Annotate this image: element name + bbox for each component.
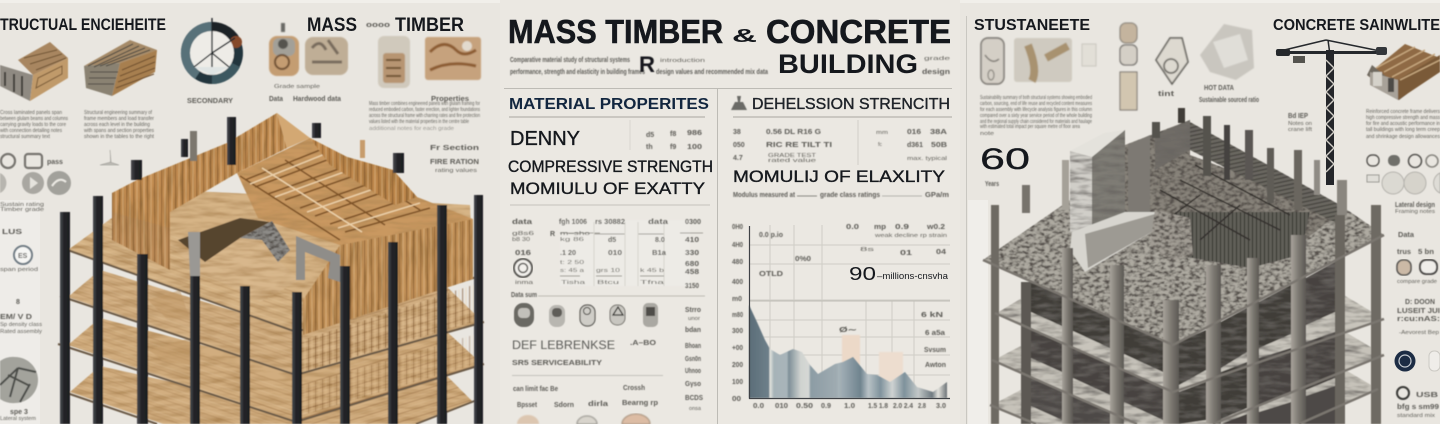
right label column: unor bbox=[688, 316, 700, 322]
icons: small round grey badges: Rated assembly bbox=[0, 329, 43, 335]
icons: bottom peach seals bbox=[517, 414, 650, 424]
heading: timber: TIMBER bbox=[395, 15, 464, 36]
right label column: bdan bbox=[685, 327, 701, 334]
chart annotations: 04 bbox=[936, 249, 946, 256]
text block: timber copy: across the structural frame with charring rates and fire protection bbox=[369, 113, 480, 119]
icons: small round grey badges: Sp density class bbox=[0, 322, 43, 328]
rule: data section: Data sum bbox=[511, 292, 537, 299]
text block: sustainability copy: and the regional supply chain considered for materials and haulage bbox=[980, 119, 1092, 125]
text block: structural copy one bbox=[0, 110, 68, 140]
illustration: concrete tower bbox=[983, 108, 1384, 424]
y axis labels: 480 bbox=[732, 259, 743, 266]
y axis labels: 100 bbox=[732, 379, 743, 386]
title: concrete: CONCRETE bbox=[766, 13, 951, 50]
panel: mass timber top diagrams bbox=[100, 15, 481, 174]
x axis labels: 3.0 bbox=[936, 403, 946, 410]
chart annotations: 0%0 bbox=[795, 256, 811, 263]
chart grid bbox=[749, 225, 950, 398]
chart annotations: 0.9 bbox=[895, 224, 909, 231]
chart annotations: Ø∼ bbox=[839, 327, 857, 334]
text block: sustainability copy bbox=[980, 95, 1092, 137]
label: small connector word: oooo bbox=[366, 22, 390, 29]
compression values: 38A bbox=[930, 129, 947, 136]
floor plate grain bbox=[68, 212, 483, 424]
text block: deflection details: Bearng rp bbox=[622, 400, 658, 407]
chart annotations: mp bbox=[874, 224, 886, 231]
storey edge beams bbox=[983, 235, 1384, 424]
text block: timber copy: additional notes for each grade bbox=[369, 126, 454, 132]
right label column bbox=[685, 307, 703, 412]
row: density: DENNY bbox=[510, 128, 580, 150]
text block: concrete density labels: -Aevorest Bep bbox=[1399, 330, 1439, 336]
x axis labels: 1.5 1.8 bbox=[868, 403, 888, 410]
subtitle text lines: performance, strength and elasticity in building frames bbox=[510, 69, 645, 76]
captions: sustainability samples: tint bbox=[1158, 91, 1175, 98]
chart: deflection and strength area bbox=[732, 224, 950, 410]
table: deflection data grid: rs 30882 bbox=[595, 219, 625, 226]
icon: timber block one bbox=[0, 42, 68, 101]
text block: structural copy two: shown in the tables to the right bbox=[84, 134, 155, 140]
subtitle text lines: R bbox=[639, 52, 655, 77]
storey edge beams bbox=[58, 248, 484, 424]
upper posts bbox=[131, 117, 404, 180]
text block: sustainability copy: note bbox=[980, 131, 994, 137]
icon: timber block two bbox=[84, 40, 157, 96]
table: deflection data grid: 0300 bbox=[685, 219, 701, 226]
text block: timber side labels: Fr Section bbox=[430, 145, 479, 152]
text block: concrete lower labels: 5 bn bbox=[1418, 249, 1434, 256]
icon: navy seal bbox=[1394, 350, 1440, 372]
x axis labels: 1.0 bbox=[844, 403, 855, 410]
upper timber volume bbox=[112, 113, 473, 335]
caption: sixty: Years bbox=[985, 181, 999, 188]
text block: deflection details: dirla bbox=[588, 401, 608, 408]
panel rules bbox=[504, 16, 966, 424]
x axis labels: 0.9 bbox=[821, 403, 831, 410]
chart annotations: OTLD bbox=[759, 271, 783, 278]
chart annotations: w0.2 bbox=[926, 224, 945, 231]
table: compression strength bbox=[731, 96, 950, 199]
table: deflection data grid: inma bbox=[515, 280, 533, 286]
icons: five badge row bbox=[514, 303, 658, 327]
text block: timber sample captions: Grade sample bbox=[274, 84, 320, 90]
text block: timber side labels: rating values bbox=[435, 168, 478, 174]
subtitle text lines bbox=[510, 52, 950, 77]
row: modulus of elasticity: MOMIULU OF EXATTY bbox=[510, 180, 705, 198]
compression values: rated value bbox=[768, 158, 816, 164]
y axis labels: 0H0 bbox=[732, 224, 743, 231]
icon: ring seal bbox=[514, 259, 532, 277]
text block: timber copy: reduced embodied carbon, faster erection, and lighter foundations bbox=[369, 107, 480, 113]
callout: 90 value: 90 bbox=[849, 264, 876, 284]
table: deflection data grid: fgh 1006 bbox=[559, 219, 587, 226]
text block: structural copy two: with spans and section properties bbox=[84, 128, 154, 134]
chart axes bbox=[750, 226, 950, 398]
subtitle text lines: design bbox=[922, 69, 950, 76]
text block: concrete lower labels: Framing notes bbox=[1395, 209, 1436, 215]
table: deflection data grid: 8.0 bbox=[655, 237, 665, 244]
text block: structural copy one: structural summary text bbox=[0, 134, 51, 140]
heading icon bbox=[731, 96, 747, 110]
icons: small round grey badges: pass bbox=[47, 159, 63, 166]
text block: deflection details: .A–BO bbox=[630, 340, 657, 347]
table: deflection data grid: k 45 b bbox=[640, 268, 664, 274]
table: deflection data grid: 458 bbox=[685, 269, 699, 276]
text block: concrete copy bbox=[1366, 109, 1440, 140]
text block: deflection details: can limit fac Be bbox=[513, 386, 558, 393]
text block: concrete copy: tall buildings with long term creep bbox=[1366, 127, 1440, 133]
subtitle text lines: design values and recommended mix data bbox=[656, 69, 768, 76]
compression values: 0.56 DL R16 G bbox=[766, 129, 822, 136]
stat: sixty: 60 bbox=[980, 143, 1030, 176]
title: mass timber: MASS TIMBER bbox=[508, 13, 723, 50]
table: deflection data grid: Tfna bbox=[640, 280, 664, 286]
table: deflection data grid: t: 2 50 bbox=[560, 260, 584, 266]
text block: structural copy one: with connection detailing notes bbox=[0, 128, 62, 134]
compression values bbox=[733, 129, 947, 164]
right label column: Bhoan bbox=[685, 343, 701, 350]
table: deflection data grid bbox=[512, 219, 703, 290]
x axis labels: 2.0 2.4 bbox=[893, 403, 913, 410]
icon: grey cross section disc bbox=[0, 357, 38, 403]
panel: concrete right column bbox=[1273, 17, 1440, 419]
caption: disc label: spe 3 bbox=[10, 409, 28, 416]
icon: small ring and code: bfg s sm99 bbox=[1397, 404, 1439, 411]
heading: mass: MASS bbox=[307, 15, 357, 36]
icons: small round grey badges: Sustain rating bbox=[0, 202, 44, 208]
vertical columns bbox=[60, 195, 483, 424]
table: material properties bbox=[508, 96, 713, 198]
concrete tall block bbox=[1070, 130, 1193, 272]
thin divider notes: Modulus measured at bbox=[733, 192, 796, 199]
caption: wheel label: SECONDARY bbox=[187, 98, 233, 105]
subtitle text lines: grade bbox=[924, 56, 950, 62]
y axis labels: 200 bbox=[732, 362, 743, 369]
text block: structural copy two: frame members and load transfer bbox=[84, 116, 154, 122]
text block: deflection details: SR5 SERVICEABILITY bbox=[512, 360, 602, 367]
heading: structural engineering: TRUCTUAL ENCIEHEITE bbox=[0, 16, 166, 34]
text block: structural copy two: Structural engineering summary of bbox=[84, 110, 153, 116]
y axis labels: m80 bbox=[732, 312, 743, 319]
y axis labels: 4H0 bbox=[732, 242, 743, 249]
panel: structural engineering left column bbox=[0, 16, 166, 422]
x axis labels bbox=[753, 403, 946, 410]
text block: sustainability copy: compared over a sixty year service period of the whole building bbox=[980, 113, 1092, 119]
label: small left note bbox=[100, 150, 119, 165]
text block: sustainability copy: for each assembly with lifecycle analysis figures in this column bbox=[980, 107, 1092, 113]
density values: f8 bbox=[670, 131, 676, 138]
icons: small round grey badges: EM/ V D bbox=[0, 314, 32, 321]
text block: concrete lower labels bbox=[1395, 202, 1436, 256]
compression values: 050 bbox=[733, 142, 745, 149]
table: deflection data grid: data bbox=[648, 219, 668, 226]
table: deflection data grid: grs 10 bbox=[596, 268, 620, 274]
text block: timber copy: Mass timber combines engineered panels with glulam framing for bbox=[369, 101, 480, 107]
captions: sustainability samples: Notes on bbox=[1288, 121, 1312, 127]
x axis labels: 0.0 bbox=[753, 403, 764, 410]
subtitle text lines: Comparative material study of structural systems bbox=[510, 57, 630, 64]
text block: timber side labels: FIRE RATION bbox=[430, 159, 479, 166]
text block: deflection details bbox=[512, 340, 663, 409]
icons: small round grey badges: span period bbox=[0, 267, 38, 273]
compression values: fc bbox=[878, 142, 882, 148]
heading: material properties: MATERIAL PROPERITES bbox=[509, 96, 709, 113]
text block: timber side labels bbox=[430, 145, 479, 174]
vertical concrete columns bbox=[991, 205, 1381, 424]
table: deflection data grid: m–sho bbox=[560, 231, 590, 237]
y axis labels: 400 bbox=[732, 279, 743, 286]
icon: tower crane bbox=[1276, 40, 1387, 185]
table: deflection data grid: kg 86 bbox=[560, 237, 584, 243]
icons: concrete badges bbox=[1367, 154, 1440, 194]
table: deflection data grid: 330 bbox=[685, 250, 699, 257]
text block: sustainability copy: with estimated total impact per square metre of floor area bbox=[980, 124, 1080, 130]
table: deflection data grid: Btcu bbox=[597, 280, 619, 286]
table: deflection data grid: 410 bbox=[685, 237, 699, 244]
table: deflection data grid: b8 30 bbox=[512, 237, 530, 243]
peach highlight bars bbox=[842, 335, 903, 382]
text block: concrete lower labels: Data bbox=[1398, 232, 1414, 239]
y axis labels: 00 bbox=[732, 396, 741, 403]
y axis labels: m0 bbox=[732, 296, 742, 303]
icon: small ring and code: USB bbox=[1416, 392, 1438, 399]
heading: compression strength: DEHELSSION STRENCITH bbox=[752, 96, 950, 113]
text block: timber sample captions: Data bbox=[269, 96, 283, 103]
table: deflection data grid: 3150 bbox=[685, 283, 699, 290]
title block bbox=[508, 13, 951, 79]
panel: centre title and tables bbox=[504, 13, 966, 424]
right label column: onsa bbox=[689, 406, 701, 412]
text block: deflection details: Sdorn bbox=[554, 402, 574, 409]
captions: sustainability samples: Sustainable sourced ratio bbox=[1199, 97, 1259, 104]
chart annotations bbox=[759, 224, 947, 369]
icons: small round grey badges: LUS bbox=[2, 229, 22, 236]
text block: concrete density labels: LUSEIT JUI bbox=[1397, 308, 1440, 315]
heading: deflection: DEF LEBRENKSE bbox=[512, 338, 615, 352]
text block: concrete density labels bbox=[1397, 279, 1440, 336]
right label column: BCDS bbox=[685, 395, 703, 402]
density values: f9 bbox=[670, 144, 676, 151]
y axis labels: 300 bbox=[732, 328, 743, 335]
compression values: RIC RE TILT TI bbox=[766, 142, 832, 149]
icons: timber samples bbox=[269, 23, 481, 88]
compression values: 016 bbox=[907, 129, 921, 136]
area series bbox=[749, 305, 947, 398]
icons: small round grey badges bbox=[0, 154, 71, 335]
text block: concrete density labels: r:cu:nAS: bbox=[1397, 316, 1440, 323]
caption: disc label: Lateral system bbox=[0, 416, 36, 422]
chart annotations: Svsum bbox=[924, 347, 946, 354]
row: modulus of elasticity: MOMULIJ OF ELAXLITY bbox=[733, 168, 945, 186]
x axis labels: 0.50 bbox=[796, 403, 813, 410]
text block: structural copy one: Cross laminated panels span bbox=[0, 110, 62, 116]
icons: sustainability samples bbox=[981, 23, 1254, 110]
x axis labels: 010 bbox=[775, 403, 788, 410]
density values: d5 bbox=[646, 132, 654, 139]
captions: sustainability samples: crane lift bbox=[1288, 127, 1313, 133]
density values: 986 bbox=[687, 130, 702, 137]
callout: 90 value: –millions-cnsvha bbox=[877, 271, 948, 281]
chart annotations: 8s bbox=[860, 247, 875, 253]
icons: rounded pair bbox=[1397, 260, 1437, 275]
text block: sustainability copy: carbon, sourcing, end of life reuse and recycled content measures bbox=[980, 101, 1092, 107]
icon: small ring and code: standard mix bbox=[1397, 413, 1436, 419]
title: building: BUILDING bbox=[778, 49, 918, 79]
chart annotations: 01 bbox=[900, 250, 912, 257]
icons: small round grey badges: Timber grade bbox=[0, 207, 44, 213]
compression values: 38 bbox=[733, 129, 741, 136]
title: ampersand: & bbox=[732, 26, 757, 46]
text block: structural copy one: carrying gravity loads to the core bbox=[0, 122, 66, 128]
table: deflection data grid: data bbox=[512, 219, 532, 226]
panel: sustainability column bbox=[974, 17, 1313, 188]
chart annotations: Awton bbox=[925, 362, 946, 369]
compression values: 4.7 bbox=[733, 155, 743, 162]
icons: small round grey badges: ES bbox=[18, 253, 28, 260]
text block: timber copy bbox=[369, 96, 480, 132]
text block: timber copy: values listed with the material properties in the centre table bbox=[369, 119, 469, 125]
right label column: Gsn0n bbox=[685, 356, 701, 363]
table: deflection data grid: B1a bbox=[652, 250, 666, 257]
table: deflection data grid: 680 bbox=[685, 261, 699, 268]
central core opening bbox=[175, 218, 340, 302]
row: compressive strength: COMPRESSIVE STRENGTH bbox=[508, 158, 713, 176]
text block: structural copy one: between glulam beams and columns bbox=[0, 116, 68, 122]
chart annotations: 0.0 bbox=[846, 224, 859, 231]
y axis labels: +00 bbox=[732, 345, 743, 352]
table: deflection data grid: s: 45 a bbox=[560, 268, 584, 274]
text block: timber sample captions: Hardwood data bbox=[293, 96, 341, 103]
table: deflection data grid: 016 bbox=[515, 250, 531, 257]
text block: concrete density labels: D: DOON bbox=[1405, 299, 1435, 306]
subtitle text lines: introduction bbox=[660, 58, 705, 64]
text block: deflection details: Crossh bbox=[623, 385, 645, 392]
icon: section wheel bbox=[181, 18, 243, 84]
chart annotations: 0.0 p.io bbox=[759, 232, 783, 239]
floor plates bbox=[983, 200, 1384, 424]
y axis labels bbox=[732, 224, 743, 403]
illustration: mass timber tower bbox=[58, 113, 484, 424]
density values bbox=[646, 130, 702, 151]
text block: timber copy: Properties bbox=[431, 96, 469, 103]
captions: sustainability samples: Bd IEP bbox=[1288, 113, 1308, 120]
thin divider notes bbox=[733, 192, 949, 199]
icon: timber hall block bbox=[1367, 44, 1440, 100]
text block: structural copy two bbox=[84, 110, 155, 140]
right label column: Uhnoo bbox=[685, 368, 701, 375]
table: deflection data grid: d5 bbox=[608, 237, 616, 244]
table: deflection data grid: .1 20 bbox=[560, 250, 576, 257]
upper posts bbox=[1022, 108, 1347, 215]
x axis labels: 2.8 bbox=[918, 403, 926, 410]
icons: small round grey badges: 8 bbox=[16, 299, 20, 306]
compression values: 50B bbox=[931, 142, 947, 149]
chart annotations: weak decline rp strain bbox=[875, 233, 947, 239]
compression values: max. typical bbox=[907, 156, 947, 162]
table: deflection data grid: g8s6 bbox=[512, 231, 534, 237]
table: deflection data grid: 010 bbox=[608, 250, 622, 257]
text block: concrete lower labels: trus bbox=[1397, 249, 1411, 256]
callout: 90 value bbox=[849, 264, 948, 284]
captions: sustainability samples: HOT DATA bbox=[1204, 85, 1234, 92]
shadowed storey interiors bbox=[1031, 262, 1335, 424]
text block: deflection details: Bpsset bbox=[517, 402, 538, 409]
heading: sustainability: STUSTANEETE bbox=[974, 17, 1090, 34]
chart annotations: 6 a5a bbox=[925, 330, 945, 337]
text block: concrete copy: and shrinkage design allowances bbox=[1366, 134, 1440, 140]
text block: structural copy two: across each level in the building bbox=[84, 122, 150, 128]
table: deflection data grid: Tisha bbox=[561, 280, 585, 286]
thin divider notes: grade class ratings bbox=[820, 192, 880, 199]
compression values: GRADE TEST bbox=[768, 153, 816, 159]
chart annotations: 6 kN bbox=[921, 312, 943, 319]
compression values: d361 bbox=[907, 142, 923, 149]
text block: concrete density labels: compare grade bbox=[1397, 279, 1437, 285]
captions: sustainability samples bbox=[1158, 85, 1313, 133]
upper construction mass bbox=[1125, 120, 1340, 268]
lower storey plates bbox=[68, 190, 483, 424]
text block: sustainability copy: Sustainability summary of both structural systems showing embodied bbox=[980, 95, 1092, 101]
thin divider notes: GPa/m bbox=[925, 192, 949, 199]
table: deflection data grid: R bbox=[550, 231, 555, 238]
density values: 100 bbox=[687, 144, 702, 151]
compression values: mm bbox=[876, 130, 888, 136]
text block: timber sample captions bbox=[269, 84, 341, 103]
density values: th bbox=[646, 144, 653, 151]
right label column: Strro bbox=[685, 307, 701, 314]
right label column: Gγso bbox=[685, 381, 701, 388]
icon: small ring and code bbox=[1397, 387, 1439, 419]
caption: disc label bbox=[0, 409, 36, 422]
